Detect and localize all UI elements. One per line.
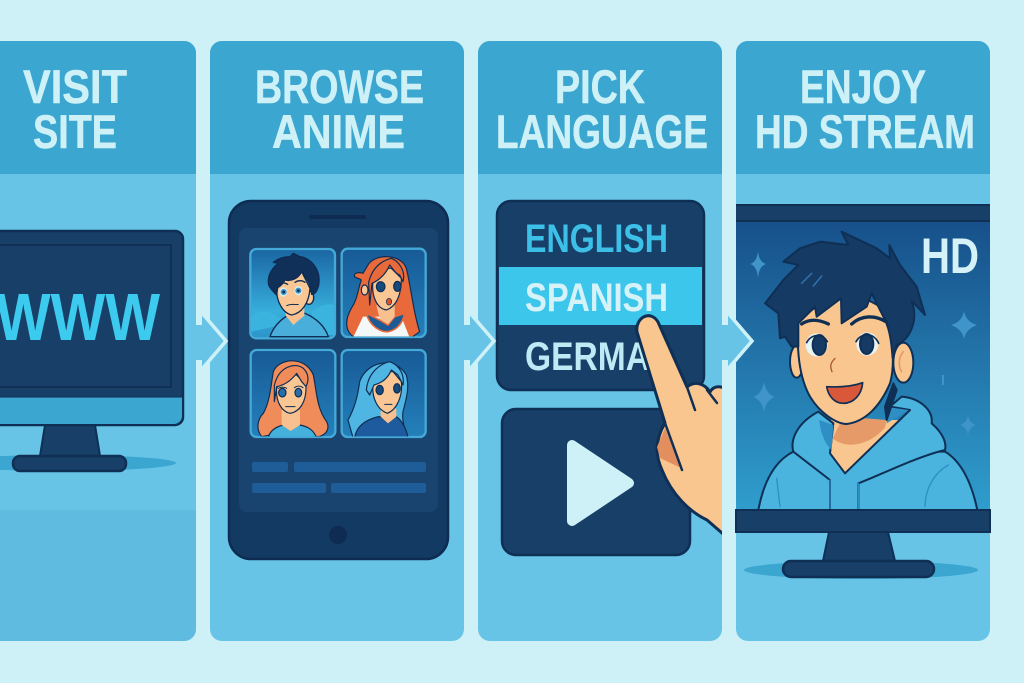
language menu — [497, 201, 704, 390]
panel: visit site — [0, 41, 196, 641]
heading: pick language: LANGUAGE — [496, 105, 708, 158]
character: smiling boy in hoodie — [758, 232, 977, 510]
thumbnail: boy — [250, 249, 335, 338]
arrow: step two to three — [464, 313, 494, 369]
monitor bottom bezel — [736, 510, 990, 532]
heading: pick language — [496, 60, 708, 158]
list placeholder bars — [252, 462, 426, 493]
thumbnail: girl with orange hair — [251, 350, 335, 438]
heading: visit site: VISIT — [23, 60, 127, 113]
panel: enjoy hd stream — [736, 41, 990, 641]
heading: visit site: SITE — [33, 105, 117, 158]
arrow: step three to four — [722, 313, 752, 369]
icon: desktop monitor with www — [0, 231, 183, 471]
icon: desktop monitor with www: WWW — [0, 280, 161, 355]
icon: phone — [229, 201, 448, 559]
thumbnail: girl with red hair — [342, 249, 426, 338]
hd label: HD — [921, 228, 979, 284]
heading: enjoy hd stream — [755, 60, 975, 158]
heading: pick language: PICK — [555, 60, 645, 113]
heading: browse anime: BROWSE — [255, 60, 424, 113]
heading: browse anime — [255, 60, 424, 158]
language menu: ENGLISH — [525, 217, 668, 261]
thumbnail: girl with blue hair — [342, 350, 426, 438]
language menu: GERMA — [525, 335, 650, 379]
arrow: step one to two — [196, 313, 226, 369]
heading: enjoy hd stream: ENJOY — [800, 60, 926, 113]
play button — [502, 409, 690, 555]
monitor screen — [736, 204, 990, 510]
language menu: SPANISH — [525, 276, 668, 320]
icon: monitor stand — [744, 532, 978, 579]
icon: pointing hand — [637, 316, 730, 540]
panel: pick language — [478, 41, 730, 641]
sparkles — [750, 251, 977, 436]
panel: browse anime — [210, 41, 464, 641]
heading: browse anime: ANIME — [272, 105, 405, 158]
heading: visit site — [23, 60, 127, 158]
